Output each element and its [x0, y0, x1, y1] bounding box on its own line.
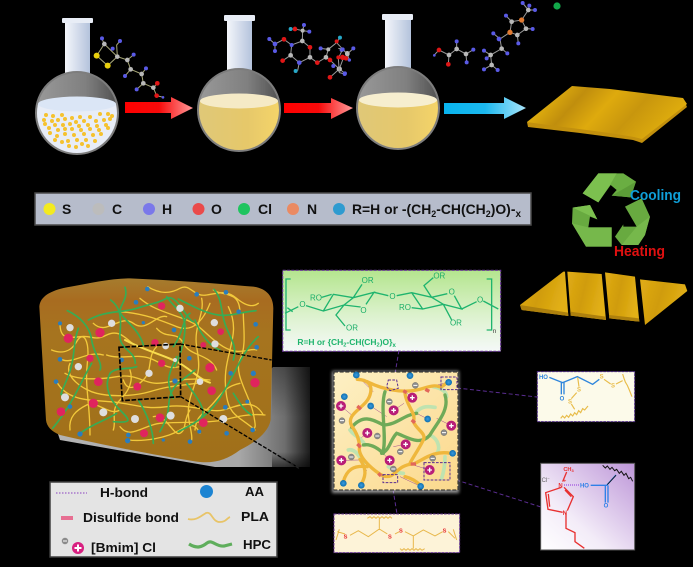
ionic liquid legend row: [Bmim] Cl [91, 540, 156, 555]
molecule: lipoic acid [94, 36, 164, 99]
sulfur labels: S [344, 535, 348, 541]
panel: acrylic acid disulfide detail: O [560, 396, 565, 402]
panel: HPC chemical structure [283, 270, 501, 351]
hydrogen bond dots [564, 483, 579, 487]
panel: ionic liquid interaction detail: HO [580, 484, 589, 490]
recycling symbol [572, 173, 650, 247]
legend: oxygen [192, 201, 222, 217]
panel: ionic liquid interaction detail: CH [563, 467, 571, 473]
legend: hydrogen [143, 201, 172, 217]
panel: ionic liquid interaction detail: + [563, 479, 566, 485]
legend: R group [333, 201, 521, 220]
highlighted PLA strand [125, 340, 210, 383]
gel block with polymer network [39, 278, 297, 467]
R group formula: 2 [343, 343, 346, 349]
H-bond legend row: H-bond [100, 485, 148, 500]
R group formula: 2 [377, 343, 380, 349]
element legend bar [35, 193, 531, 225]
glow around detail panel [332, 371, 459, 493]
flask 3 with yellow solution [357, 14, 439, 150]
green HPC strands [53, 287, 258, 443]
legend: sulfur [44, 201, 71, 217]
polymer brackets and rings [285, 278, 498, 330]
atom labels in the HPC structure: RO [310, 293, 322, 302]
AA skeleton [549, 377, 599, 394]
label: cooling: Cooling [630, 188, 681, 204]
sulfur labels: S [399, 528, 403, 534]
atom labels in the HPC structure: O [477, 295, 483, 304]
callout leader lines [392, 350, 541, 514]
legend: R group: )O)- [491, 201, 516, 217]
legend: R group: 2 [486, 209, 491, 219]
sulfur labels: S [388, 535, 392, 541]
label: heating: Heating [614, 244, 665, 260]
panel: ionic liquid interaction detail: 3 [571, 468, 574, 473]
HPC legend row [189, 537, 272, 552]
zoom selection outline [119, 344, 181, 401]
arrow: red step 1 [125, 97, 193, 119]
legend: R group: x [515, 209, 521, 220]
gel block: gray projection shadow [55, 367, 310, 467]
panel: acrylic acid disulfide detail [537, 372, 635, 422]
imidazolium ring [546, 472, 584, 548]
disulfide bond segments [357, 389, 429, 476]
atom labels in the HPC structure [299, 271, 497, 335]
atom labels in the HPC structure: O [299, 300, 306, 309]
sulfur chain [561, 374, 632, 418]
sulfur labels [344, 528, 447, 541]
sulfur labels in AA panel: S [600, 375, 604, 381]
panel: ionic liquid interaction detail: Cl [542, 478, 547, 484]
atom labels in the HPC structure: OR [450, 318, 462, 327]
panel: ionic liquid interaction detail [541, 463, 635, 550]
highlight boxes [383, 377, 457, 483]
atom labels in the HPC structure: OR [346, 323, 358, 332]
arrow: red step 2 [284, 98, 353, 119]
sulfur labels in AA panel [568, 375, 615, 405]
H-bond legend row [56, 485, 148, 500]
atom labels in the HPC structure: n [493, 328, 497, 335]
R group formula: )O} [380, 338, 392, 347]
atom labels in the HPC structure: O [389, 292, 396, 301]
atom labels in the HPC structure: OR [433, 271, 446, 280]
sulfur labels in AA panel: S [611, 384, 615, 390]
legend: carbon [92, 201, 122, 217]
PLA legend row: PLA [241, 509, 270, 524]
cut gel film in pieces [520, 272, 687, 325]
green HPC tubes [352, 392, 446, 453]
pink cation beads [57, 302, 260, 437]
yellow PLA strands [52, 287, 265, 440]
panel: ionic liquid interaction detail: N [558, 484, 563, 490]
legend: chlorine: Cl [258, 201, 272, 217]
legend: carbon: C [112, 201, 122, 217]
panel: ionic liquid interaction detail: O [604, 503, 609, 509]
sulfur labels in AA panel: S [577, 388, 581, 394]
atom labels in the HPC structure: RO [399, 303, 411, 312]
hydrogen bond links [341, 375, 451, 486]
panel: ionic liquid interaction detail: − [547, 476, 550, 481]
panel: acrylic acid disulfide detail: HO [539, 375, 548, 381]
panel: ionic liquid interaction detail: N [563, 511, 567, 517]
disulfide bond legend row: Disulfide bond [83, 510, 179, 525]
atom labels in the HPC structure: O [449, 288, 455, 297]
panel: network detail [334, 372, 458, 490]
legend: sulfur: S [62, 201, 71, 217]
blue AA beads [54, 287, 259, 444]
AA legend row [200, 484, 265, 499]
sulfur labels: S [443, 528, 447, 534]
orange PLA tubes [343, 379, 451, 485]
flask 2 with yellow solution [198, 15, 280, 151]
carboxylic acid [591, 475, 616, 503]
blue AA balls [340, 372, 456, 490]
legend: R group: 2 [431, 209, 436, 219]
legend: chlorine [238, 201, 272, 217]
gray anions [339, 382, 447, 472]
R group formula: x [392, 343, 397, 349]
zoom line continuation [280, 457, 300, 469]
flask 1 with yellow particles [36, 18, 118, 154]
legend: R group: -CH(CH [436, 201, 486, 217]
pink cations [336, 393, 456, 475]
molecule: acrylic acid and ionic liquid [336, 1, 537, 76]
R group formula: -CH(CH [346, 338, 377, 347]
HPC legend row: HPC [243, 537, 272, 552]
pale green tube ends [348, 387, 447, 478]
legend: nitrogen: N [307, 201, 317, 217]
ionic liquid legend row [62, 538, 156, 555]
legend: nitrogen [287, 201, 317, 217]
legend: R group: R=H or -(CH [352, 201, 432, 217]
legend: network components [50, 482, 277, 557]
atom labels in the HPC structure: O [360, 306, 367, 315]
gray anion beads [61, 305, 227, 423]
PLA legend row [188, 509, 270, 524]
sulfur labels in AA panel: S [568, 399, 572, 405]
legend: oxygen: O [211, 201, 222, 217]
intact gel film [527, 86, 687, 143]
AA legend row: AA [245, 484, 265, 499]
atom labels in the HPC structure: OR [362, 276, 374, 285]
molecule: chloride atom [553, 2, 561, 10]
arrow: blue step 3 [444, 97, 526, 119]
panel: disulfide bond detail [334, 514, 460, 553]
molecule: hydroxypropyl cellulose [267, 23, 350, 80]
R group formula: R=H or {CH [297, 338, 341, 347]
backbone chains [336, 517, 457, 550]
legend: hydrogen: H [162, 201, 172, 217]
